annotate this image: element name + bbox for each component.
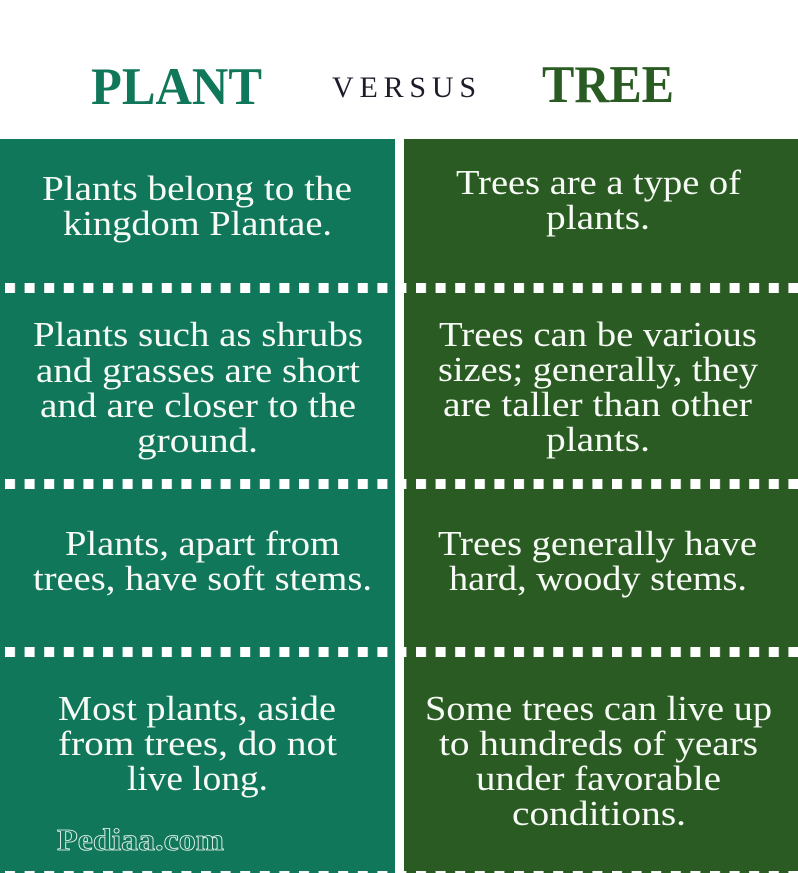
- panel: tree column: [404, 139, 798, 873]
- text: plant stems: Plants, apart from: [65, 524, 340, 563]
- text: plant size: and are closer to the: [40, 386, 356, 425]
- text: plant stems: trees, have soft stems.: [33, 559, 372, 598]
- text: tree kingdom: [456, 163, 741, 237]
- text: tree lifespan: under favorable: [476, 759, 721, 798]
- text: tree stems: hard, woody stems.: [449, 559, 747, 598]
- text: tree lifespan: to hundreds of years: [439, 724, 758, 763]
- text: tree kingdom: plants.: [546, 198, 650, 237]
- text: plant kingdom: kingdom Plantae.: [63, 204, 332, 243]
- panel: plant column: [0, 139, 395, 873]
- text: tree size: are taller than other: [443, 385, 752, 424]
- text: plant stems: [33, 524, 372, 598]
- text: tree lifespan: [425, 689, 772, 833]
- title: versus label: VERSUS: [332, 71, 476, 104]
- text: tree kingdom: Trees are a type of: [456, 163, 741, 202]
- text: plant size: ground.: [137, 421, 258, 460]
- text: tree size: [438, 315, 759, 459]
- text: tree size: sizes; generally, they: [438, 350, 759, 389]
- text: plant lifespan: live long.: [127, 759, 268, 798]
- text: plant lifespan: from trees, do not: [58, 724, 337, 763]
- text: plant size: [33, 315, 363, 460]
- text: tree lifespan: conditions.: [512, 794, 686, 833]
- title: tree heading: TREE: [542, 56, 674, 114]
- text: tree stems: [438, 524, 757, 598]
- text: plant lifespan: [58, 689, 337, 798]
- logo: Pediaa.com: Pediaa.com: [57, 822, 224, 857]
- text: tree lifespan: Some trees can live up: [425, 689, 772, 728]
- text: plant kingdom: [42, 169, 352, 243]
- text: tree size: plants.: [546, 420, 650, 459]
- title: plant heading: PLANT: [91, 58, 262, 116]
- text: plant kingdom: Plants belong to the: [42, 169, 352, 208]
- text: tree stems: Trees generally have: [438, 524, 757, 563]
- text: tree size: Trees can be various: [439, 315, 757, 354]
- text: plant lifespan: Most plants, aside: [58, 689, 336, 728]
- text: plant size: and grasses are short: [36, 351, 360, 390]
- text: plant size: Plants such as shrubs: [33, 315, 363, 354]
